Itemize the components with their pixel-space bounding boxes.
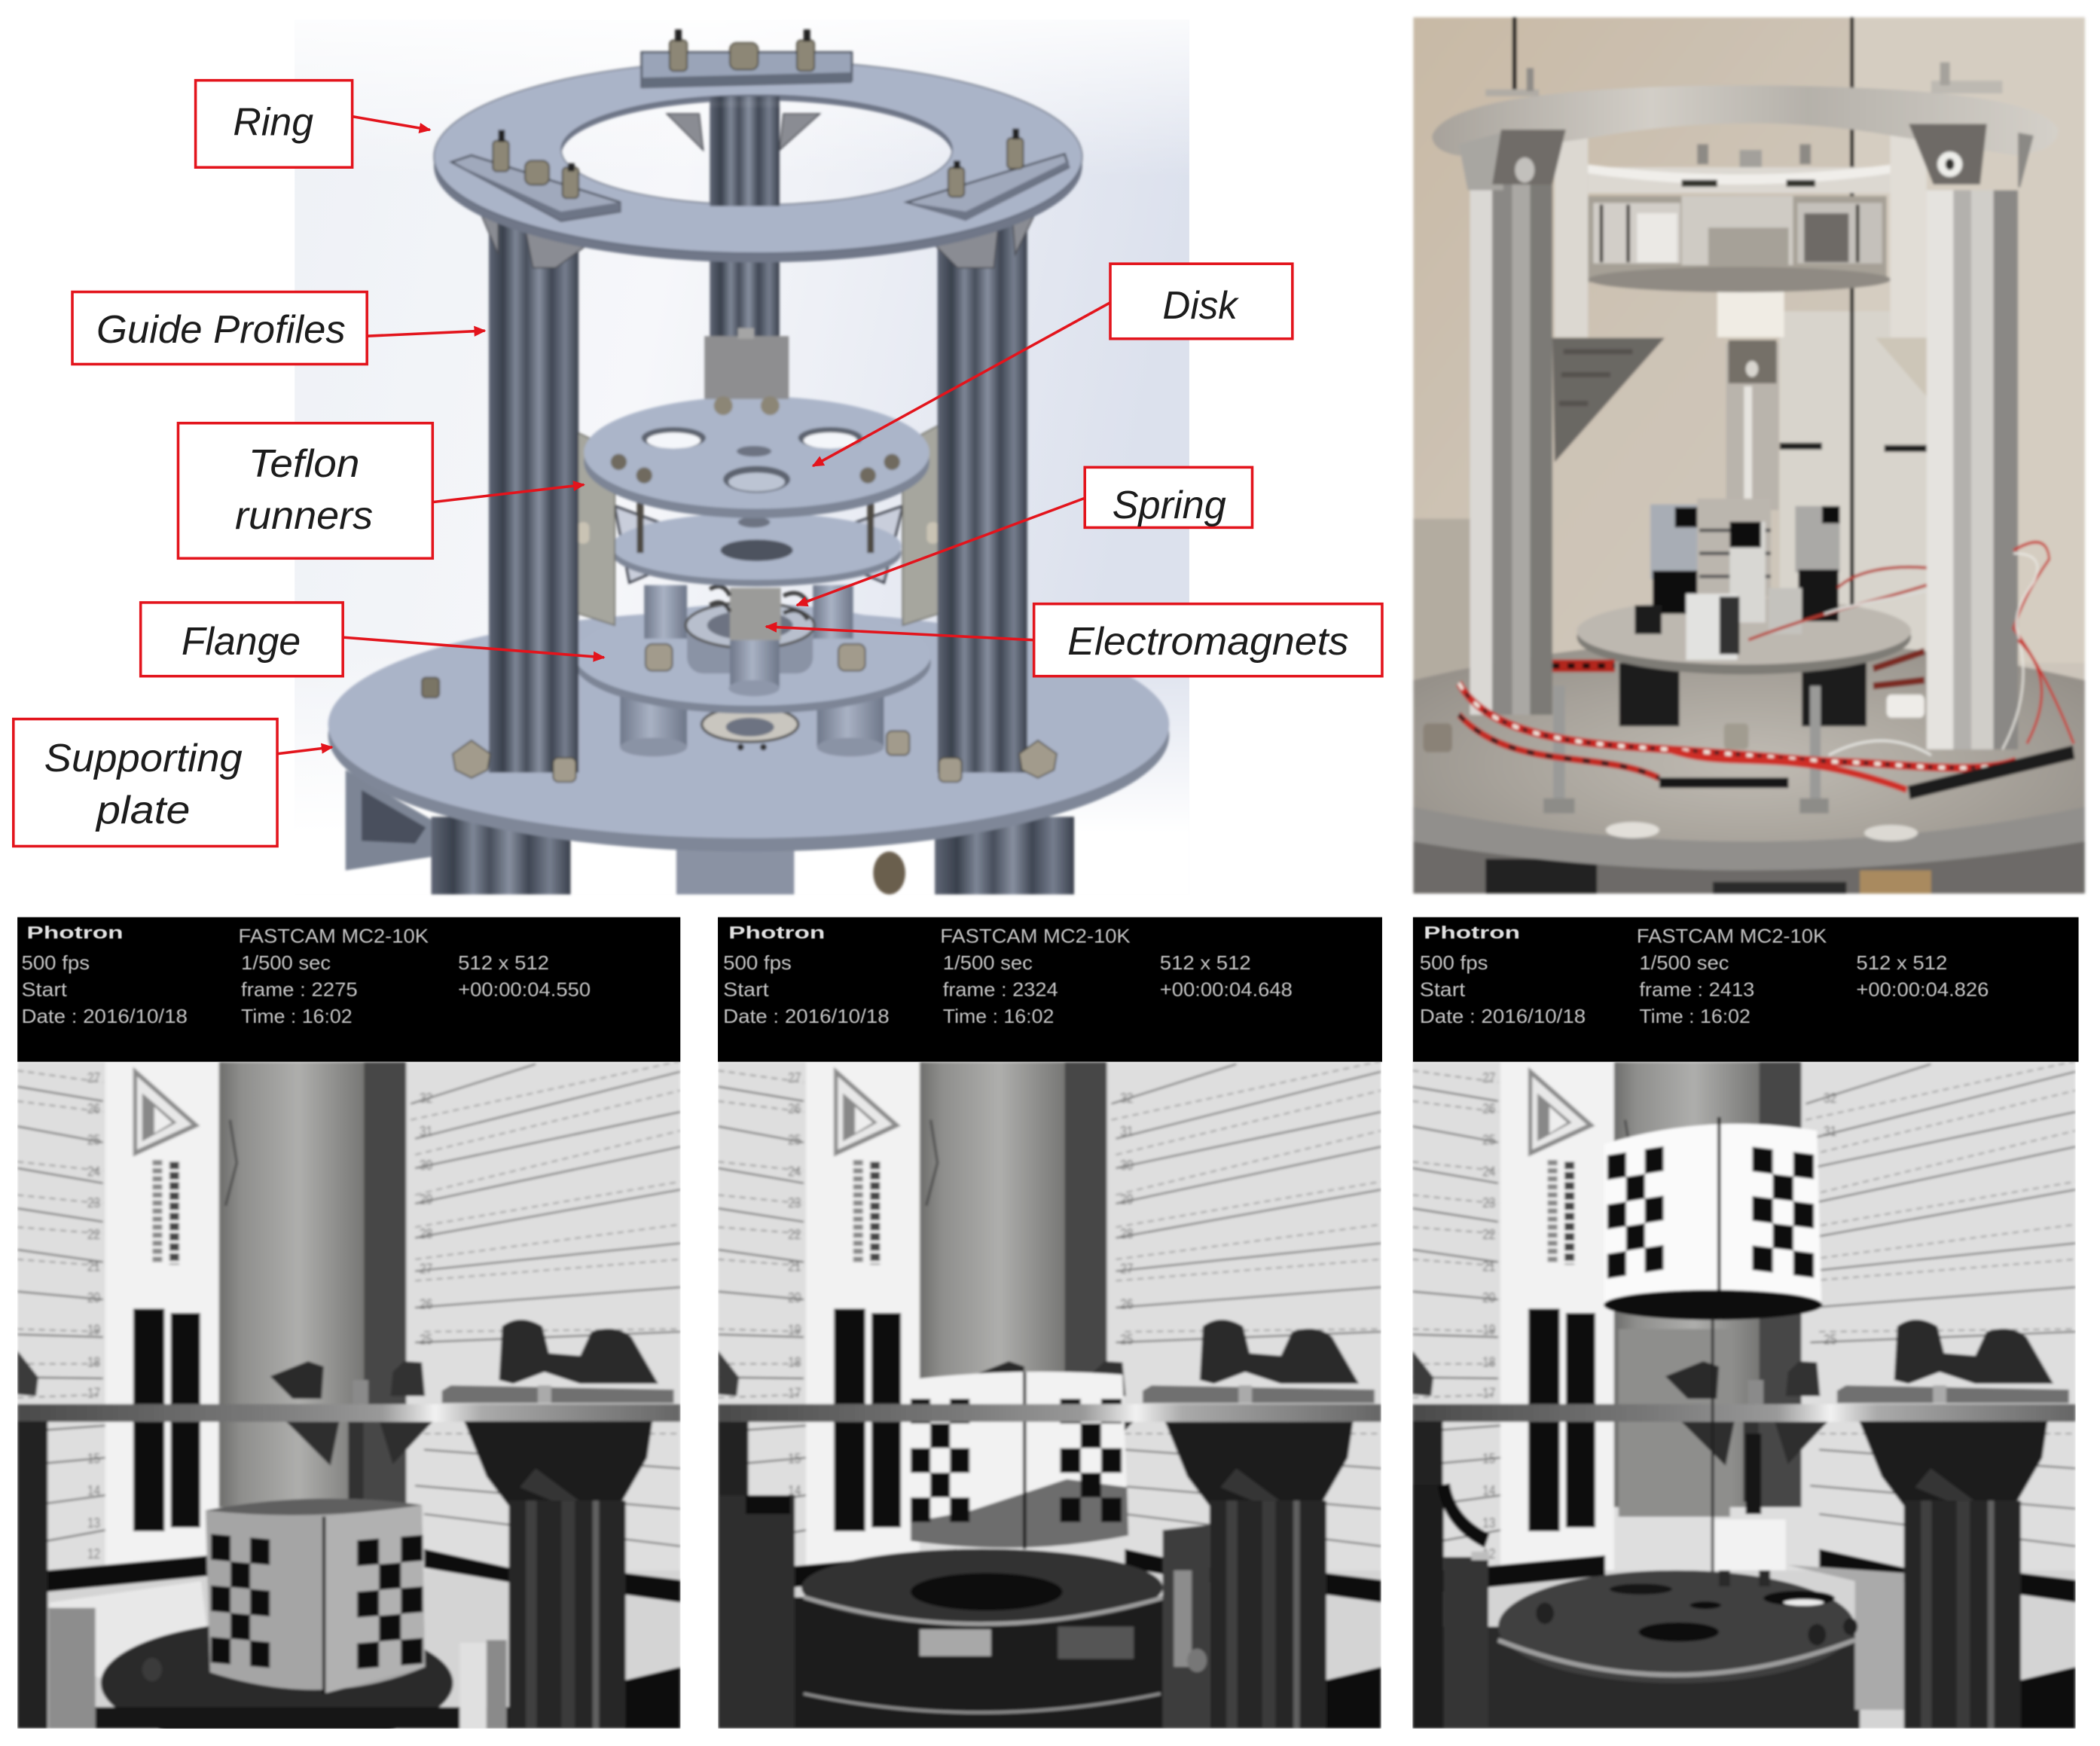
ruler numbers: 21 <box>788 1259 801 1274</box>
camera info header: Start <box>21 980 67 1001</box>
flange <box>575 604 931 713</box>
ruler numbers: 18 <box>1482 1354 1495 1370</box>
camera info header: Time : 16:02 <box>1639 1006 1751 1027</box>
ruler numbers: 25 <box>420 1332 432 1348</box>
guide profiles <box>489 221 1027 773</box>
ruler numbers: 23 <box>87 1195 100 1210</box>
ruler numbers: 17 <box>788 1385 801 1401</box>
callout: Disk: Disk <box>1162 283 1239 327</box>
callout: Teflon runners: runners <box>235 493 373 537</box>
ruler numbers: 22 <box>87 1227 100 1242</box>
ruler numbers: 15 <box>1482 1451 1495 1467</box>
spring and electromagnets on flange <box>1635 499 1840 660</box>
callout: Guide Profiles: Guide Profiles <box>96 307 346 351</box>
ruler numbers: 27 <box>87 1070 100 1085</box>
ruler numbers: 13 <box>1482 1516 1495 1531</box>
ruler numbers: 19 <box>87 1322 100 1338</box>
ruler numbers: 23 <box>1482 1195 1495 1210</box>
camera info header: frame : 2413 <box>1639 980 1754 1001</box>
panel: photograph of the physical rig <box>1413 17 2085 893</box>
left rod <box>48 1608 96 1729</box>
upper disk <box>584 396 929 518</box>
ruler numbers: 14 <box>1482 1483 1495 1498</box>
rear guide profile <box>710 107 780 341</box>
callout: Teflon runners <box>178 423 432 558</box>
camera info header: Date : 2016/10/18 <box>723 1006 890 1027</box>
ruler numbers: 12 <box>1482 1546 1495 1562</box>
camera info header: Time : 16:02 <box>241 1006 353 1027</box>
frame image: cylinder rising through the ring <box>718 1061 1381 1729</box>
top ring with corner brackets <box>1432 63 2058 191</box>
camera info header: FASTCAM MC2-10K <box>940 926 1131 947</box>
white block on disk <box>1714 1519 1786 1570</box>
callout: Flange <box>141 603 343 676</box>
lower part of pillar <box>1619 1329 1730 1517</box>
ruler numbers: 27 <box>788 1070 801 1085</box>
ruler numbers: 31 <box>1824 1124 1836 1139</box>
camera info header: Start <box>723 980 769 1001</box>
callout: Supporting plate <box>14 719 277 846</box>
camera info header: 1/500 sec <box>943 953 1033 974</box>
ruler numbers: 21 <box>87 1259 100 1274</box>
ruler numbers: 30 <box>1120 1158 1134 1173</box>
camera info header: Start <box>1420 980 1465 1001</box>
flange plate <box>1577 598 1911 674</box>
ruler numbers: 22 <box>1482 1227 1495 1242</box>
camera info header: +00:00:04.648 <box>1160 980 1293 1001</box>
callout: Teflon runners: Teflon <box>249 441 359 485</box>
plate screws <box>422 677 1057 782</box>
dark base disk <box>99 1625 455 1729</box>
callout: Electromagnets: Electromagnets <box>1067 619 1349 663</box>
ruler numbers: 18 <box>87 1354 100 1370</box>
ruler numbers: 32 <box>420 1091 432 1106</box>
camera info header <box>17 917 680 1062</box>
ruler numbers: 25 <box>1120 1332 1134 1348</box>
ruler numbers: 25 <box>1824 1332 1836 1348</box>
top disk with holes and bolts <box>1443 1565 1904 1729</box>
ruler numbers: 23 <box>788 1195 801 1210</box>
ruler numbers: 24 <box>87 1164 100 1180</box>
callout: Supporting plate: Supporting <box>44 736 243 780</box>
ruler numbers: 28 <box>420 1226 432 1241</box>
ruler numbers: 29 <box>420 1192 432 1207</box>
central column <box>1717 282 1784 510</box>
ruler numbers <box>788 1070 1134 1498</box>
ruler numbers: 24 <box>1482 1164 1495 1180</box>
ruler numbers: 12 <box>87 1546 100 1562</box>
ruler numbers: 26 <box>1120 1296 1134 1312</box>
ruler numbers: 25 <box>788 1132 801 1148</box>
stem above block <box>1746 1433 1761 1514</box>
callout: Disk <box>1110 264 1293 339</box>
ruler numbers: 31 <box>420 1124 432 1139</box>
ruler numbers: 27 <box>1120 1261 1134 1277</box>
camera info header: Photron <box>728 923 825 942</box>
arrow: Disk <box>813 303 1110 466</box>
camera info header: +00:00:04.826 <box>1856 980 1989 1001</box>
arrow: Teflon runners <box>432 484 584 502</box>
CAD drawing: assembled rig <box>328 29 1169 894</box>
camera info header: 500 fps <box>723 953 792 974</box>
ruler numbers: 17 <box>1482 1385 1495 1401</box>
Teflon runners <box>575 423 943 625</box>
ruler numbers: 25 <box>1482 1132 1495 1148</box>
callout: Flange: Flange <box>182 619 301 663</box>
ruler numbers: 20 <box>1482 1290 1495 1305</box>
ruler numbers <box>87 1070 432 1562</box>
upper ring, disk and box <box>1555 133 1927 337</box>
small screw on disk <box>142 1658 162 1681</box>
bright floor card <box>50 1581 210 1677</box>
camera info header <box>1413 917 2079 1062</box>
ruler numbers: 25 <box>87 1132 100 1148</box>
ruler numbers: 15 <box>87 1451 100 1467</box>
twisted red and white wires <box>1459 542 2074 792</box>
ring gussets <box>475 114 1038 268</box>
camera info header: Time : 16:02 <box>943 1006 1054 1027</box>
callout: Supporting plate: plate <box>95 788 190 832</box>
ruler numbers: 18 <box>788 1354 801 1370</box>
arrow: Supporting plate <box>277 747 332 754</box>
camera info header: 1/500 sec <box>1639 953 1729 974</box>
ruler numbers: 26 <box>87 1101 100 1117</box>
camera info header: frame : 2324 <box>943 980 1058 1001</box>
checkerboard cylinder <box>206 1499 425 1694</box>
ruler numbers: 30 <box>420 1158 432 1173</box>
arrow: Spring <box>797 498 1085 605</box>
white rod <box>459 1640 507 1729</box>
ruler numbers: 14 <box>87 1483 100 1498</box>
camera info header: Photron <box>1424 923 1520 942</box>
checkerboard cylinder <box>907 1372 1128 1549</box>
panel: high-speed frame 2275 <box>17 917 680 1744</box>
ruler numbers: 14 <box>788 1483 801 1498</box>
ring edge passing in front of cylinder <box>718 1404 1381 1422</box>
grey block above disk <box>704 328 789 415</box>
camera info header <box>718 917 1382 1062</box>
ruler numbers: 27 <box>1482 1070 1495 1085</box>
ruler numbers: 28 <box>1120 1226 1134 1241</box>
camera info header: frame : 2275 <box>241 980 358 1001</box>
checkerboard cylinder <box>1604 1117 1822 1320</box>
lower magnets under flange <box>620 696 884 756</box>
camera info header: FASTCAM MC2-10K <box>1637 926 1827 947</box>
ruler numbers: 20 <box>87 1290 100 1305</box>
left column and cable <box>1412 1485 1489 1729</box>
camera info header: Date : 2016/10/18 <box>1420 1006 1586 1027</box>
camera info header: 500 fps <box>1420 953 1488 974</box>
teflon runner left and right <box>718 1495 1210 1729</box>
ruler numbers: 29 <box>1120 1192 1134 1207</box>
bolts on base plate <box>1423 686 1829 813</box>
gussets <box>1552 337 1927 462</box>
arrow: Guide Profiles <box>367 331 485 336</box>
ruler numbers: 22 <box>788 1227 801 1242</box>
callout: Ring <box>196 81 353 167</box>
guide profiles <box>1470 133 2018 749</box>
ruler numbers: 26 <box>420 1296 432 1312</box>
disks, spacers and lower plate <box>749 1549 1165 1729</box>
panel: high-speed frame 2413 <box>1412 917 2079 1729</box>
thin rod from cylinder <box>1711 1318 1714 1629</box>
ruler numbers: 26 <box>788 1101 801 1117</box>
ruler numbers: 19 <box>1482 1322 1495 1338</box>
flange screws <box>646 644 865 671</box>
ruler numbers: 31 <box>1120 1124 1134 1139</box>
camera info header: 512 x 512 <box>1160 953 1251 974</box>
supporting plate <box>328 611 1169 852</box>
ruler numbers: 15 <box>788 1451 801 1467</box>
ruler numbers: 26 <box>1482 1101 1495 1117</box>
ruler numbers: 13 <box>87 1516 100 1531</box>
CAD viewport background <box>295 20 1189 894</box>
ruler numbers: 32 <box>1824 1091 1836 1106</box>
ruler numbers: 27 <box>420 1261 432 1277</box>
callout: Electromagnets <box>1034 604 1382 676</box>
supporting plate underside <box>346 770 1074 894</box>
spring <box>710 586 807 620</box>
ruler numbers: 17 <box>87 1385 100 1401</box>
camera info header: FASTCAM MC2-10K <box>238 926 429 947</box>
camera info header: 512 x 512 <box>458 953 549 974</box>
camera info header: 1/500 sec <box>241 953 331 974</box>
ruler numbers: 19 <box>788 1322 801 1338</box>
ruler numbers <box>1482 1070 1836 1562</box>
camera info header: 512 x 512 <box>1856 953 1947 974</box>
ruler numbers: 32 <box>1120 1091 1134 1106</box>
camera info header: Photron <box>27 923 124 942</box>
ring <box>434 60 1082 262</box>
ruler numbers: 20 <box>788 1290 801 1305</box>
arrow: Flange <box>343 637 604 658</box>
rear profile seen through ring <box>710 96 780 206</box>
ruler numbers: 24 <box>788 1164 801 1180</box>
camera info header: Date : 2016/10/18 <box>21 1006 188 1027</box>
electromagnets under flange <box>1619 663 1866 726</box>
panel: high-speed frame 2324 <box>718 917 1382 1729</box>
callout: Spring: Spring <box>1113 483 1226 527</box>
arrow: Electromagnets <box>766 627 1034 640</box>
base plate <box>1413 639 2085 893</box>
arrow: Ring <box>353 117 430 130</box>
ring clamp plates and screws <box>451 29 1069 221</box>
callout: Ring: Ring <box>233 100 313 144</box>
electromagnets and central post <box>644 585 853 696</box>
ruler numbers: 21 <box>1482 1259 1495 1274</box>
callout: Guide Profiles <box>72 292 367 365</box>
frame image: cylinder at top of travel <box>1412 1061 2076 1729</box>
frame image: cylinder resting on the disk <box>17 1061 680 1744</box>
camera info header: +00:00:04.550 <box>458 980 591 1001</box>
lower guided disk and spacer frame <box>612 502 902 587</box>
panel: CAD model of the test rig <box>14 20 1382 894</box>
camera info header: 500 fps <box>21 953 90 974</box>
room background <box>1412 15 2086 682</box>
callout: Spring <box>1085 467 1252 527</box>
